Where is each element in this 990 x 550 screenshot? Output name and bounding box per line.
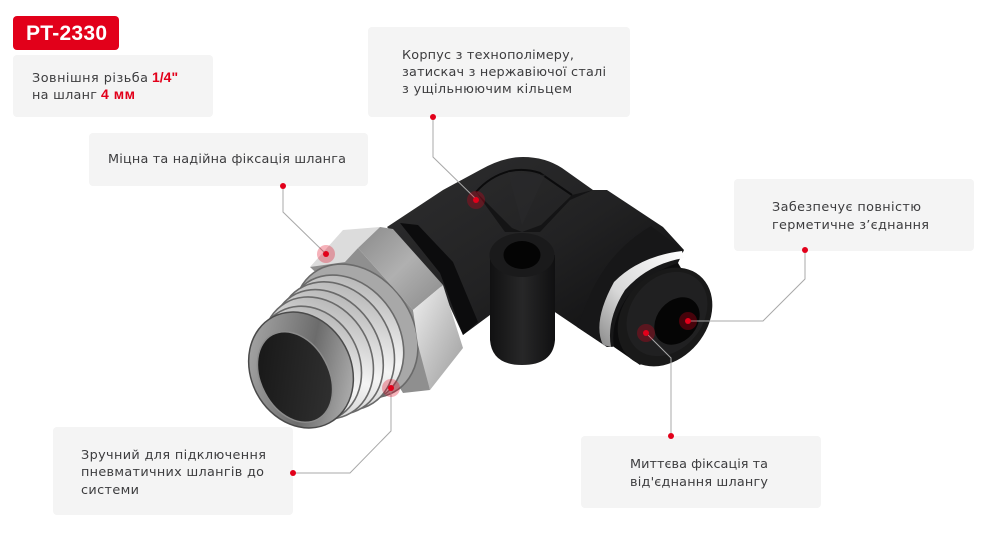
callout: convenient connection: системи: [81, 483, 139, 498]
callout: instant fixation: [581, 436, 821, 508]
thread mouth opening: [229, 294, 373, 446]
callout: instant fixation: Миттєва фіксація та: [630, 457, 768, 472]
callout: hermetic connection: [734, 179, 974, 251]
black mounting post: [490, 233, 555, 365]
pointer: hermetic connection: [679, 247, 808, 330]
callout: hermetic connection: герметичне з’єднання: [772, 218, 929, 233]
collet face with bore: [598, 249, 732, 385]
callout: body material: [368, 27, 630, 117]
callout: convenient connection: [53, 427, 293, 515]
callout: convenient connection: пневматичних шлангів до: [81, 465, 264, 480]
product photo: pneumatic elbow fitting: [229, 157, 732, 446]
callout: thread and hose size: 4 мм: [101, 86, 135, 102]
black elbow body: [387, 157, 684, 347]
callout: hermetic connection: Забезпечує повністю: [772, 200, 921, 215]
callout: secure hose fixation: Міцна та надійна фіксація шланга: [108, 152, 346, 167]
pointer: secure fixation: [280, 183, 335, 263]
callout: body material: Корпус з технополімеру,: [402, 48, 574, 63]
pointer: instant fixation: [637, 324, 674, 439]
callout: thread and hose size: Зовнішня різьба: [32, 71, 148, 86]
metal hex nut back: [310, 248, 430, 393]
metal thread: [236, 240, 444, 441]
callout: body material: затискач з нержавіючої сталі: [402, 65, 606, 80]
callout: thread and hose size: на шланг: [32, 88, 97, 103]
callout: instant fixation: від'єднання шлангу: [630, 475, 768, 490]
pointer: convenient connection: [290, 379, 400, 476]
pointer: body material: [430, 114, 485, 209]
callout: thread and hose size: 1/4": [152, 69, 178, 85]
badge: PT-2330: PT-2330: [26, 22, 107, 45]
callout: secure hose fixation: [89, 133, 368, 186]
badge: PT-2330: [13, 16, 119, 50]
callout: body material: з ущільнюючим кільцем: [402, 82, 572, 97]
callout: thread and hose size: [13, 55, 213, 117]
metal hex nut faces: [310, 227, 463, 390]
chrome ring on collet: [599, 251, 700, 365]
callout: convenient connection: Зручний для підключення: [81, 448, 266, 463]
